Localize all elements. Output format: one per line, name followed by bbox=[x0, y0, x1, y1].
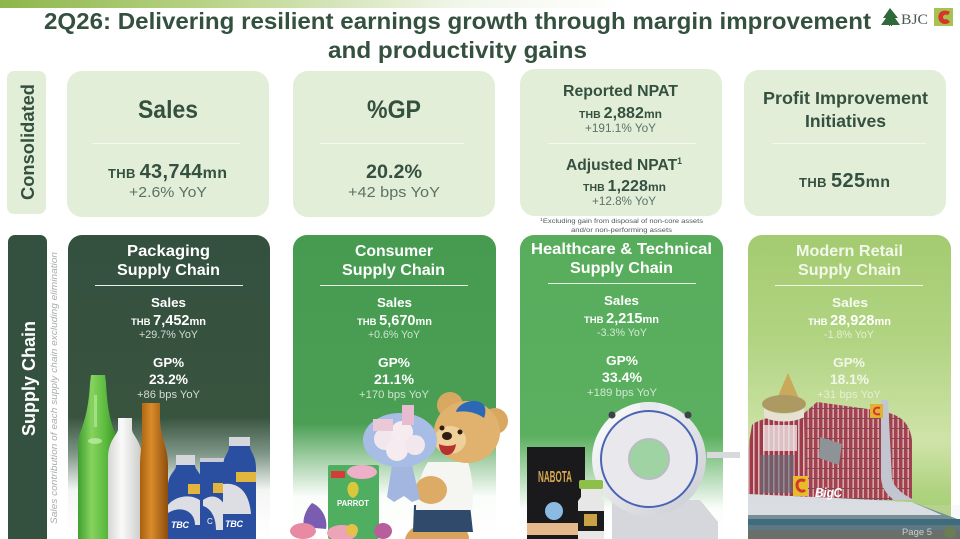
icon: BJC tree bbox=[881, 8, 900, 26]
sales stats bbox=[584, 293, 659, 339]
main facade bbox=[802, 402, 912, 500]
face bbox=[434, 426, 466, 454]
heading: Profit Improvement bbox=[763, 88, 928, 108]
title: 2Q26: Delivering resilient earnings growth through margin improvement bbox=[44, 8, 871, 34]
heading: Supply Chain bbox=[570, 260, 673, 277]
GP stats: 21.1% bbox=[374, 371, 415, 387]
GP stats bbox=[587, 353, 658, 399]
illustration: Nabota box and vial: NABOTA bbox=[538, 469, 572, 486]
value: THB 2,882mn bbox=[579, 105, 662, 122]
heading bbox=[531, 241, 712, 277]
change: +12.8% YoY bbox=[592, 196, 656, 208]
sales stats: Sales bbox=[832, 295, 868, 310]
sales stats bbox=[131, 295, 206, 341]
green bottle bbox=[78, 375, 117, 539]
GP stats: +86 bps YoY bbox=[137, 389, 201, 401]
shirt bbox=[416, 462, 473, 510]
illustration: bottles and cans bbox=[78, 375, 256, 539]
sales stats: Sales bbox=[151, 295, 186, 310]
footnote: Excluding gain from disposal of non-core assets bbox=[543, 218, 704, 225]
illustration: Parrot soap pack and flowers: PARROT bbox=[337, 499, 369, 508]
change: +191.1% YoY bbox=[585, 123, 656, 135]
logo: BJC and Big C bbox=[881, 8, 953, 28]
panel: Sales bbox=[67, 71, 269, 217]
sales stats: THB 7,452mn bbox=[131, 313, 206, 329]
GP stats: +31 bps YoY bbox=[817, 389, 882, 401]
illustration: MRI machine bbox=[592, 402, 740, 539]
panel: NPAT bbox=[520, 69, 722, 216]
GP stats: +170 bps YoY bbox=[359, 389, 430, 401]
GP stats bbox=[817, 355, 882, 401]
GP stats: +189 bps YoY bbox=[587, 387, 658, 399]
footnote: 1 bbox=[540, 217, 543, 222]
arm bbox=[415, 476, 447, 504]
GP stats: 33.4% bbox=[602, 369, 643, 385]
GP stats: 23.2% bbox=[149, 371, 189, 387]
panel: Consolidated tab bbox=[7, 71, 46, 214]
value: THB 43,744mn bbox=[108, 161, 227, 183]
screen bbox=[819, 437, 842, 465]
heading: Reported NPAT: Reported NPAT bbox=[563, 83, 678, 100]
heading: Supply Chain bbox=[798, 262, 901, 279]
value: 20.2% bbox=[366, 162, 422, 183]
sales stats: THB 28,928mn bbox=[808, 313, 891, 329]
page number: Page 5 bbox=[902, 527, 932, 537]
heading: Adjusted NPAT: Adjusted NPAT bbox=[566, 157, 680, 174]
TBC bottle left bbox=[168, 455, 203, 539]
ears bbox=[437, 392, 463, 418]
sales stats bbox=[357, 295, 432, 341]
sales stats: Sales bbox=[604, 293, 639, 308]
TBC can: C bbox=[207, 517, 213, 526]
GP stats: 18.1% bbox=[830, 371, 870, 387]
sales stats: Sales bbox=[377, 295, 412, 310]
white bottle bbox=[108, 418, 142, 539]
illustration: teddy bear with bouquet bbox=[363, 392, 508, 539]
heading: Modern Retail bbox=[796, 243, 903, 260]
panel: Consumer Supply Chain bbox=[290, 235, 508, 539]
dome bbox=[762, 373, 806, 422]
panel: %GP bbox=[293, 71, 495, 217]
heading: Adjusted NPAT: 1 bbox=[677, 156, 682, 166]
heading: Healthcare & Technical bbox=[531, 241, 712, 258]
canopy and shopfront bbox=[748, 494, 960, 539]
pylon sign bbox=[870, 404, 883, 418]
TBC bottle right: TBC bbox=[225, 519, 244, 529]
sales stats: THB 2,215mn bbox=[584, 311, 659, 327]
Big C sign bbox=[793, 476, 843, 500]
heading bbox=[796, 243, 903, 279]
heading: Sales: Sales bbox=[138, 96, 198, 124]
TBC bottle right bbox=[223, 437, 256, 539]
top gradient band bbox=[0, 0, 960, 8]
heading: Supply Chain bbox=[117, 262, 220, 279]
BJC wordmark: BJC bbox=[901, 12, 928, 28]
bouquet bbox=[363, 405, 437, 502]
Big C sign: BigC bbox=[815, 485, 843, 500]
footnote: and/or non-performing assets bbox=[571, 227, 673, 234]
sales stats: +29.7% YoY bbox=[139, 329, 199, 341]
sales stats: -3.3% YoY bbox=[597, 327, 648, 339]
heading bbox=[342, 243, 445, 279]
panel: Profit Improvement Initiatives bbox=[744, 70, 946, 216]
heading bbox=[117, 243, 220, 279]
GP stats: GP% bbox=[153, 355, 184, 370]
title bbox=[44, 8, 871, 63]
side note: Sales contribution of each supply chain excluding elimination bbox=[49, 252, 60, 524]
GP stats bbox=[359, 355, 430, 401]
panel: Healthcare and Technical Supply Chain bbox=[520, 235, 740, 539]
pylon bbox=[881, 400, 914, 500]
footnote bbox=[540, 217, 704, 234]
heading: Packaging bbox=[127, 243, 210, 260]
TBC can bbox=[200, 458, 224, 539]
heading: Consumer bbox=[355, 243, 433, 260]
legs bbox=[405, 525, 469, 539]
sales stats bbox=[808, 295, 891, 341]
page number bbox=[902, 526, 956, 538]
amber bottle bbox=[140, 403, 168, 539]
rotunda bbox=[748, 416, 806, 499]
TBC bottle left: TBC bbox=[171, 520, 190, 530]
panel: Packaging Supply Chain bbox=[68, 235, 270, 539]
illustration: Parrot soap pack and flowers bbox=[290, 465, 392, 539]
GP stats bbox=[137, 355, 201, 401]
icon: Big C bbox=[934, 8, 953, 26]
sales stats: THB 5,670mn bbox=[357, 313, 432, 329]
change: +2.6% YoY bbox=[129, 184, 207, 201]
change: +42 bps YoY bbox=[348, 184, 440, 201]
heading: Supply Chain bbox=[342, 262, 445, 279]
heading: %GP: %GP bbox=[367, 96, 421, 124]
heading bbox=[763, 88, 928, 131]
panel: Supply Chain tab bbox=[8, 235, 47, 539]
panel: Consolidated tab: Consolidated bbox=[17, 84, 38, 200]
panel: Supply Chain tab: Supply Chain bbox=[18, 321, 39, 436]
sales stats: -1.8% YoY bbox=[824, 329, 875, 341]
GP stats: GP% bbox=[378, 355, 410, 370]
sales stats: +0.6% YoY bbox=[368, 329, 421, 341]
panel: Modern Retail Supply Chain bbox=[748, 235, 960, 539]
illustration: Big C mall bbox=[748, 373, 960, 539]
head bbox=[434, 401, 500, 463]
cap bbox=[456, 401, 485, 418]
shorts bbox=[413, 505, 473, 532]
title: and productivity gains bbox=[328, 37, 587, 63]
illustration: Nabota box and vial bbox=[527, 447, 604, 539]
GP stats: GP% bbox=[833, 355, 865, 370]
value: THB 525mn bbox=[799, 170, 890, 192]
heading: Initiatives bbox=[805, 111, 886, 131]
value: THB 1,228mn bbox=[583, 178, 666, 195]
GP stats: GP% bbox=[606, 353, 638, 368]
